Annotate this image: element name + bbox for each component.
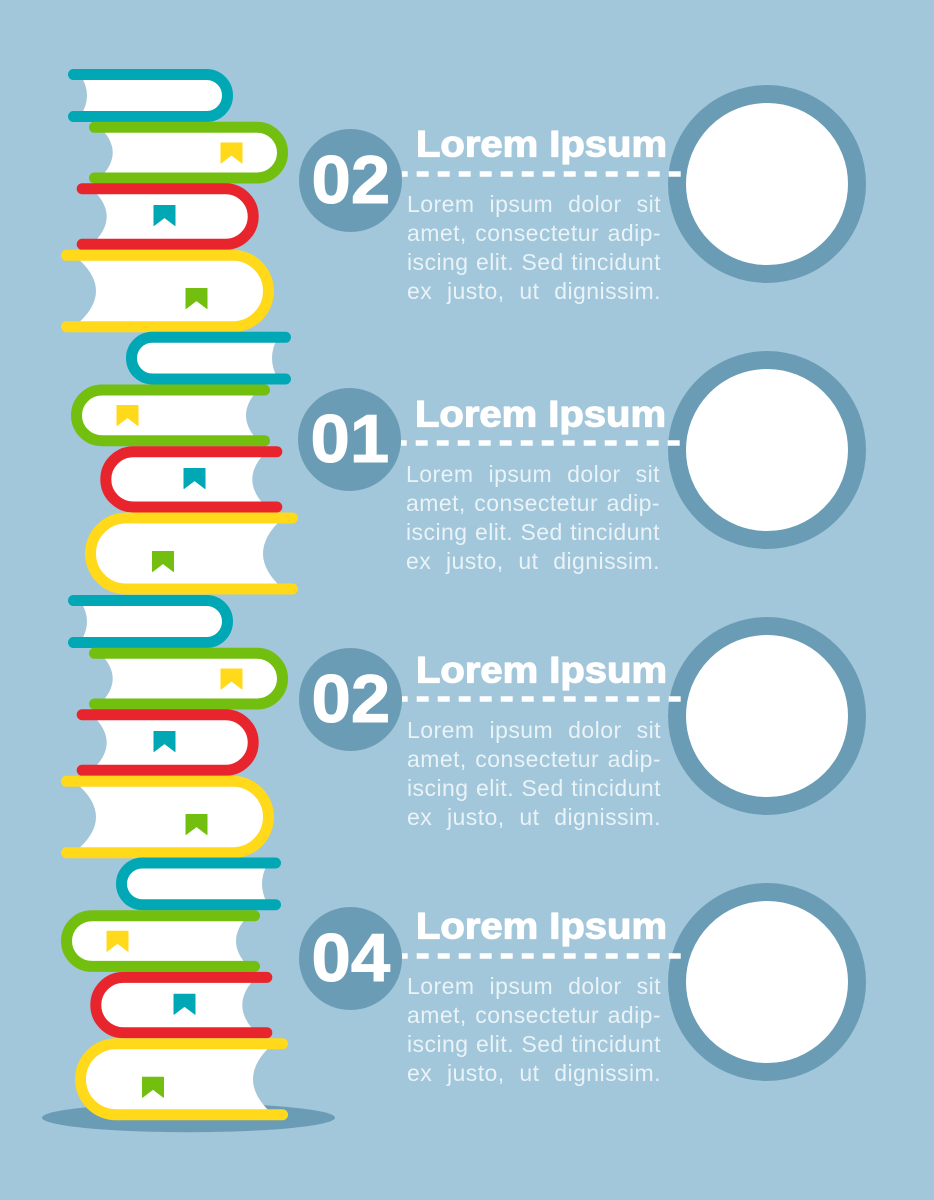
number badge <box>298 128 402 232</box>
body text: Lorem ipsum dolor sit <box>407 717 661 743</box>
number badge: 01 <box>311 400 389 476</box>
body text: ex justo, ut dignissim. <box>406 548 660 574</box>
yellow book with green bookmark <box>66 781 268 853</box>
number badge <box>298 388 400 490</box>
number badge <box>298 648 402 750</box>
green book with yellow bookmark <box>94 127 282 178</box>
icon placeholder ring <box>668 351 866 549</box>
red book with teal bookmark <box>96 977 267 1033</box>
body text: amet, consectetur adip- <box>407 220 661 246</box>
text block <box>402 124 681 304</box>
panel: item 02 (second) <box>299 617 866 830</box>
panel: item 02 (first) <box>299 85 866 304</box>
heading: Lorem Ipsum <box>416 650 667 691</box>
ground shadow <box>42 1103 335 1132</box>
body text: Lorem ipsum dolor sit <box>406 461 660 487</box>
red book with teal bookmark <box>82 715 253 770</box>
book group: bottom left-spine books <box>66 863 282 1115</box>
dashed connector <box>402 953 681 959</box>
teal book <box>74 74 228 116</box>
body text: iscing elit. Sed tincidunt <box>407 1031 661 1057</box>
yellow book with green bookmark <box>80 1044 282 1115</box>
text block <box>402 650 681 830</box>
teal book <box>74 600 228 642</box>
body text: iscing elit. Sed tincidunt <box>407 249 661 275</box>
body text: ex justo, ut dignissim. <box>407 804 661 830</box>
book group: second left-spine books <box>76 337 292 589</box>
body text: ex justo, ut dignissim. <box>407 1060 661 1086</box>
yellow book with green bookmark <box>90 518 292 589</box>
yellow book with green bookmark <box>66 255 268 327</box>
heading: Lorem Ipsum <box>416 124 667 165</box>
number badge: 02 <box>312 660 390 736</box>
red book with teal bookmark <box>82 189 253 244</box>
number badge: 02 <box>312 142 390 218</box>
body text: amet, consectetur adip- <box>407 1002 661 1028</box>
body text <box>406 461 660 574</box>
body text: Lorem ipsum dolor sit <box>407 191 661 217</box>
body text <box>407 191 661 304</box>
body text: iscing elit. Sed tincidunt <box>406 519 660 545</box>
number badge: 04 <box>312 920 390 996</box>
green book with yellow bookmark <box>94 653 282 704</box>
book group: upper right-spine books <box>66 74 282 327</box>
green book with yellow bookmark <box>66 916 254 966</box>
body text: amet, consectetur adip- <box>406 490 660 516</box>
teal book <box>122 863 276 905</box>
dashed connector <box>402 171 681 177</box>
body text: iscing elit. Sed tincidunt <box>407 775 661 801</box>
icon placeholder ring <box>668 883 866 1081</box>
icon placeholder ring <box>668 617 866 815</box>
dashed connector <box>402 696 681 702</box>
heading: Lorem Ipsum <box>416 906 667 947</box>
red book with teal bookmark <box>106 452 277 507</box>
teal book <box>132 337 286 379</box>
body text: ex justo, ut dignissim. <box>407 278 661 304</box>
book group: third right-spine books <box>66 600 282 853</box>
panel: item 04 <box>299 883 866 1086</box>
dashed connector <box>401 440 680 446</box>
body text: Lorem ipsum dolor sit <box>407 973 661 999</box>
panel: item 01 <box>298 351 866 574</box>
number badge <box>298 906 402 1010</box>
icon placeholder ring <box>668 85 866 283</box>
text block <box>401 394 680 574</box>
body text <box>407 973 661 1086</box>
body text <box>407 717 661 830</box>
body text: amet, consectetur adip- <box>407 746 661 772</box>
green book with yellow bookmark <box>76 390 264 441</box>
heading: Lorem Ipsum <box>415 394 666 435</box>
text block <box>402 906 681 1086</box>
